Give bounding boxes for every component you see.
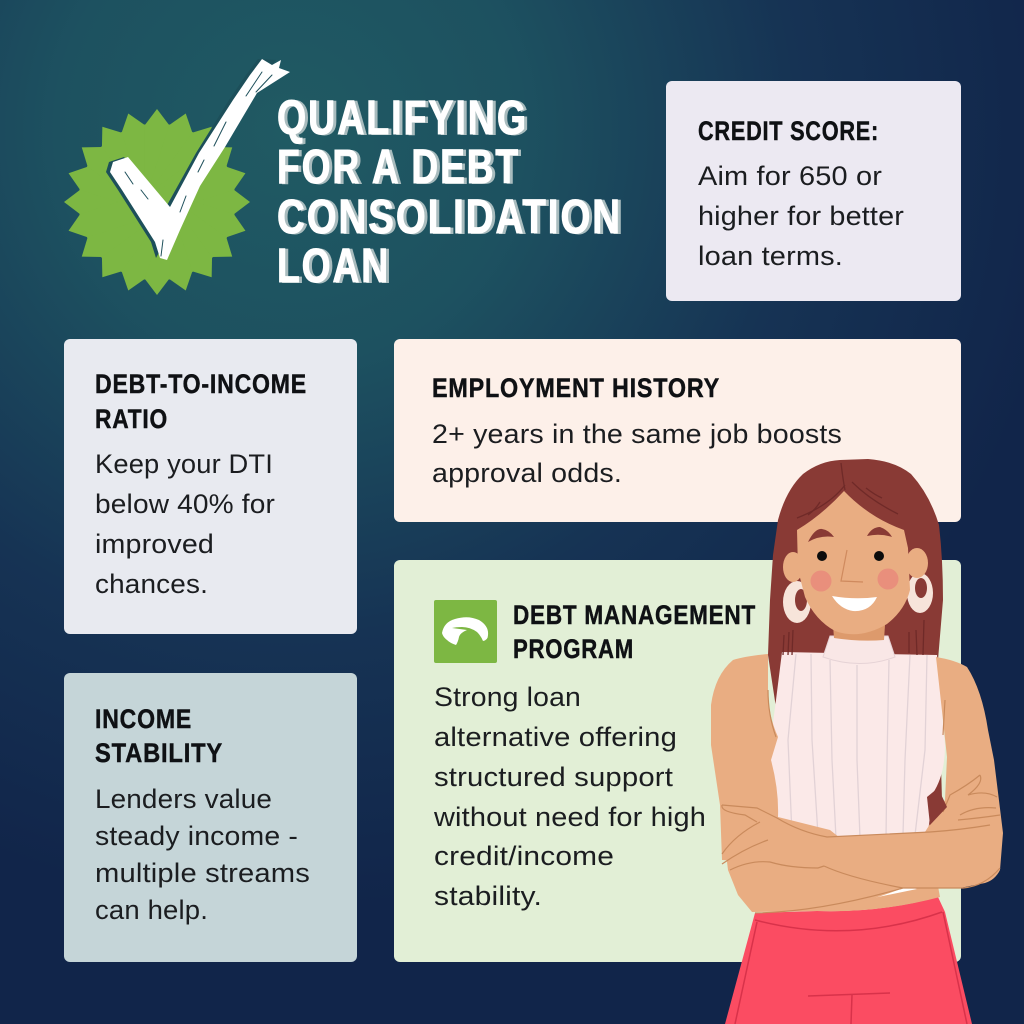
title text: FOR A DEBT (277, 141, 520, 194)
title text: QUALIFYING (277, 92, 528, 145)
icon: check mark (110, 59, 290, 260)
heading: debt management program: PROGRAM (513, 634, 634, 664)
heading: income stability: INCOME (95, 704, 192, 734)
text: credit score body: higher for better (698, 201, 904, 231)
nose (841, 550, 863, 582)
title shadow: FOR A DEBT (280, 142, 523, 194)
text: credit score body: Aim for 650 or (698, 161, 882, 191)
left arm (711, 654, 903, 912)
text: debt management body: Strong loan (434, 682, 581, 712)
heading: employment history: EMPLOYMENT HISTORY (432, 373, 720, 403)
text: income stability body: can help. (95, 895, 208, 925)
arm outlines and hand details (722, 690, 1000, 913)
heading: income stability (95, 704, 223, 768)
heading: debt-to-income ratio (95, 369, 307, 434)
text: employment body (432, 419, 842, 488)
illustration: woman with crossed arms (711, 459, 1003, 1024)
panel: debt management program (394, 560, 961, 962)
heading: credit score: CREDIT SCORE: (698, 116, 879, 146)
cheeks (810, 568, 898, 592)
icon: green badge with check mark (64, 59, 290, 295)
panel: employment history (394, 339, 961, 522)
text: debt management body: structured support (434, 762, 673, 792)
text: debt-to-income body (95, 449, 275, 599)
text: employment body: 2+ years in the same job boosts (432, 419, 842, 449)
turtleneck collar (823, 636, 895, 664)
title shadow: QUALIFYING (280, 92, 531, 146)
text: debt-to-income body: chances. (95, 569, 208, 599)
eyes (817, 551, 884, 561)
sleeveless top (770, 652, 945, 898)
midriff (800, 870, 940, 911)
text: income stability body: Lenders value (95, 784, 272, 814)
title shadow: LOAN (280, 240, 393, 294)
icon: starburst badge (64, 109, 250, 295)
title (277, 92, 625, 294)
skirt (725, 897, 972, 1024)
face (797, 491, 910, 634)
title text (277, 92, 622, 293)
text: income stability body: multiple streams (95, 858, 310, 888)
neck shadow (833, 625, 885, 641)
hair behind arm (927, 788, 947, 825)
panel: debt-to-income ratio (64, 339, 357, 634)
right arm (720, 657, 1003, 888)
title text: CONSOLIDATION (277, 191, 622, 244)
text: income stability body: steady income - (95, 821, 298, 851)
text: debt management body: credit/income (434, 841, 614, 871)
panel: credit score (666, 81, 961, 301)
earrings (783, 573, 933, 623)
text: credit score body (698, 161, 904, 271)
heading: debt-to-income ratio: DEBT-TO-INCOME (95, 369, 307, 399)
icon: debt management logo (434, 600, 497, 663)
icon: check mark brush streaks (125, 72, 272, 256)
text: employment body: approval odds. (432, 458, 622, 488)
text: debt management body: alternative offering (434, 722, 677, 752)
eyebrows (808, 527, 892, 542)
heading: income stability: STABILITY (95, 738, 223, 768)
text: debt management body: stability. (434, 881, 542, 911)
heading: debt-to-income ratio: RATIO (95, 404, 168, 434)
text: debt-to-income body: improved (95, 529, 214, 559)
title shadow (280, 92, 625, 294)
smile (832, 596, 877, 611)
title text: LOAN (277, 240, 390, 293)
heading: debt management program: DEBT MANAGEMENT (513, 600, 756, 630)
text: debt management body (433, 682, 706, 911)
hair (768, 459, 943, 830)
text: debt-to-income body: below 40% for (95, 489, 275, 519)
text: income stability body (95, 784, 310, 925)
text: credit score body: loan terms. (698, 241, 843, 271)
ears (783, 548, 928, 582)
panel: income stability (64, 673, 357, 962)
heading: debt management program (513, 600, 756, 664)
title shadow: CONSOLIDATION (280, 192, 625, 244)
text: debt-to-income body: Keep your DTI (95, 449, 273, 479)
hair strands (783, 463, 924, 655)
text: debt management body: without need for high (433, 802, 706, 832)
icon: check mark shadow (106, 59, 276, 258)
